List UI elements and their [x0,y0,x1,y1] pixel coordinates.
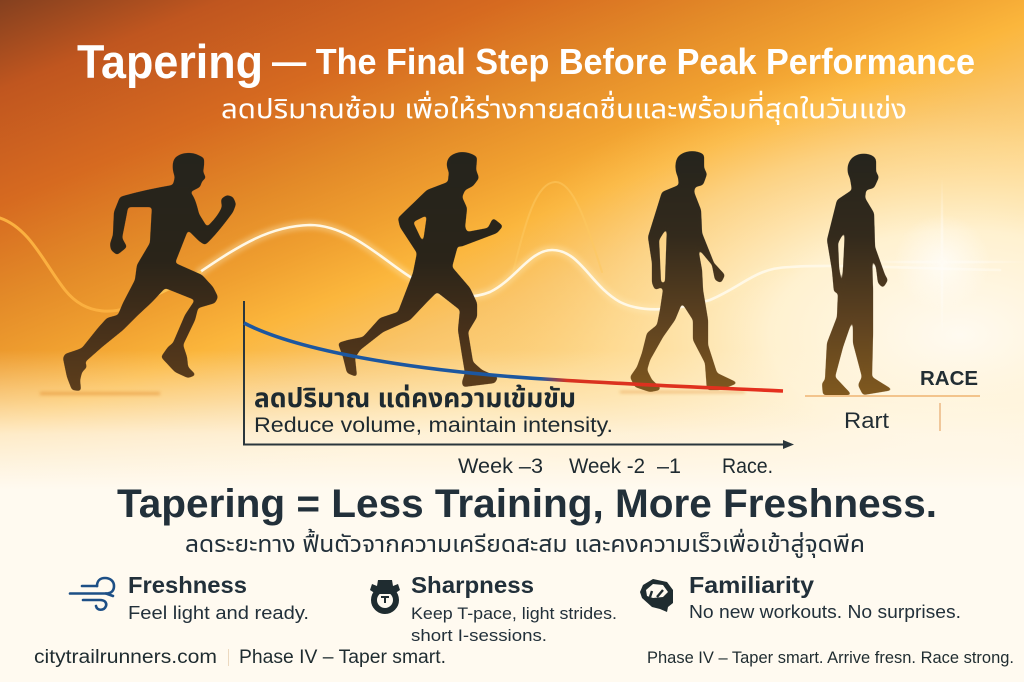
chart english caption: Reduce volume, maintain intensity. [254,414,613,437]
ground shadows [40,391,745,395]
feature: sharpness: Sharpness [411,572,534,598]
week labels [458,455,773,478]
taper curve: blue to red [244,323,783,391]
title [77,35,975,88]
walker silhouette 4: standing [822,154,893,395]
footer left [34,647,446,668]
race marker: Rart [844,408,889,433]
icon: brain head [640,579,673,612]
race marker: RACE [920,368,978,390]
feature: familiarity: No new workouts. No surprises. [689,602,961,622]
week labels: Race. [722,455,773,478]
footer left: Phase IV – Taper smart. [239,647,446,668]
feature: sharpness [370,572,617,645]
race marker [805,368,980,433]
week labels: Week –3 [458,455,543,478]
feature: familiarity: Familiarity [689,572,814,598]
runner silhouette 2: easy run [338,152,503,387]
taper chart [244,301,794,478]
feature: sharpness: short I-sessions. [411,626,547,645]
walker silhouette 3 [630,151,738,392]
icon: wind [70,578,114,610]
feature: sharpness: Keep T-pace, light strides. [411,604,617,623]
footer left: citytrailrunners.com [34,647,217,668]
thai headline support: ลดระยะทาง ฟื้นตัวจากความเครียดสะสม และคงความเร็วเพื่อเข้าสู่จุดพีค [185,528,865,559]
chart axes [244,301,794,449]
runner silhouette 1: fast run [63,153,236,391]
chart thai caption: ลดปริมาณ แด่คงความเข้มขัม [254,383,576,413]
race glow star [860,175,1024,340]
footer right: Phase IV – Taper smart. Arrive fresn. Race strong. [647,648,1014,667]
feature: freshness [70,572,309,623]
thai subtitle: ลดปริมาณซ้อม เพื่อให้ร่างกายสดชื่นและพร้อมที่สุดในวันแข่ง [221,90,907,125]
icon: stopwatch [370,580,400,611]
feature: freshness: Freshness [128,572,247,598]
glowing wave line [0,182,1000,311]
title: — The Final Step Before Peak Performance [272,41,975,82]
week labels: Week -2 [569,455,645,478]
main headline: Tapering = Less Training, More Freshness. [117,482,937,526]
title: Tapering [77,35,263,88]
feature: familiarity [640,572,961,622]
feature: freshness: Feel light and ready. [128,603,309,623]
week labels: –1 [657,455,681,478]
